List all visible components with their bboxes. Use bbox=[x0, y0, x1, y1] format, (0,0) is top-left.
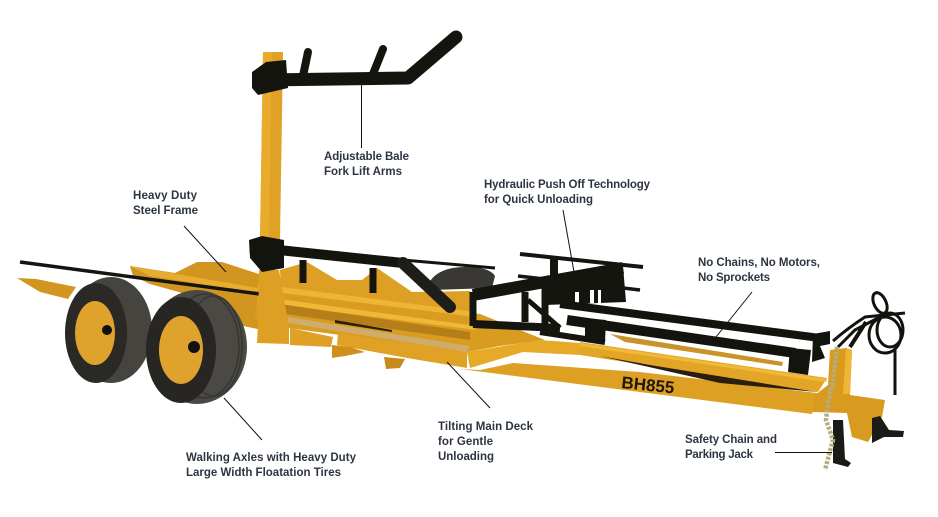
front tire bbox=[146, 290, 247, 404]
left fork tip bbox=[17, 278, 76, 299]
callout: tilting deck: Unloading bbox=[438, 451, 494, 463]
callout: no chains: No Chains, No Motors, bbox=[698, 257, 820, 269]
safety chain bbox=[825, 347, 837, 470]
leader line: safety chain bbox=[775, 452, 832, 454]
callout: tilting deck bbox=[438, 421, 534, 463]
rear tire bbox=[65, 277, 152, 383]
background tire bbox=[430, 267, 495, 290]
leader line: steel frame bbox=[184, 226, 226, 272]
rear deck behind the wheels bbox=[130, 262, 262, 330]
lower lift arm bbox=[249, 236, 495, 307]
hydraulic hoses bbox=[833, 290, 905, 395]
hitch and upright bbox=[812, 348, 904, 467]
callout: push off technology: for Quick Unloading bbox=[484, 194, 593, 206]
callout: fork lift arms: Adjustable Bale bbox=[324, 151, 409, 163]
callout: fork lift arms: Fork Lift Arms bbox=[324, 166, 402, 178]
front tongue: brace and beams bbox=[460, 334, 827, 414]
callout: safety chain and jack: Safety Chain and bbox=[685, 434, 777, 446]
callout: walking axles: Large Width Floatation Tires bbox=[186, 467, 341, 479]
leader line: no chains bbox=[716, 292, 752, 337]
callout: safety chain and jack bbox=[685, 434, 777, 461]
callout: push off technology bbox=[484, 179, 651, 206]
parking jack bbox=[833, 420, 851, 467]
leader line: fork arms bbox=[360, 85, 362, 148]
bale fork lift arms bbox=[252, 37, 456, 95]
callout: tilting deck: for Gentle bbox=[438, 436, 493, 448]
leader line: main deck bbox=[447, 362, 490, 408]
callout: steel frame: Heavy Duty bbox=[133, 190, 198, 202]
callout: push off technology: Hydraulic Push Off Technology bbox=[484, 179, 651, 191]
hydraulic cylinders bbox=[560, 304, 830, 375]
mast bbox=[257, 52, 289, 344]
main deck beams bbox=[255, 284, 545, 369]
leader line: axles bbox=[224, 398, 262, 440]
coupler bbox=[872, 416, 904, 443]
leader line: push off bbox=[563, 210, 574, 272]
callout: fork lift arms bbox=[324, 151, 409, 178]
callout: walking axles: Walking Axles with Heavy Duty bbox=[186, 452, 357, 464]
push-off rack bbox=[473, 254, 643, 342]
callout: steel frame bbox=[133, 190, 198, 217]
callout: no chains: No Sprockets bbox=[698, 272, 770, 284]
callout: no chains bbox=[698, 257, 820, 284]
trailer illustration bbox=[17, 37, 905, 470]
callout: tilting deck: Tilting Main Deck bbox=[438, 421, 534, 433]
callout: steel frame: Steel Frame bbox=[133, 205, 198, 217]
rear rail bbox=[20, 262, 260, 294]
callout: walking axles bbox=[186, 452, 357, 479]
callout: safety chain and jack: Parking Jack bbox=[685, 449, 754, 461]
upper deck plates bbox=[280, 262, 480, 330]
model label: BH855 bbox=[621, 373, 675, 398]
